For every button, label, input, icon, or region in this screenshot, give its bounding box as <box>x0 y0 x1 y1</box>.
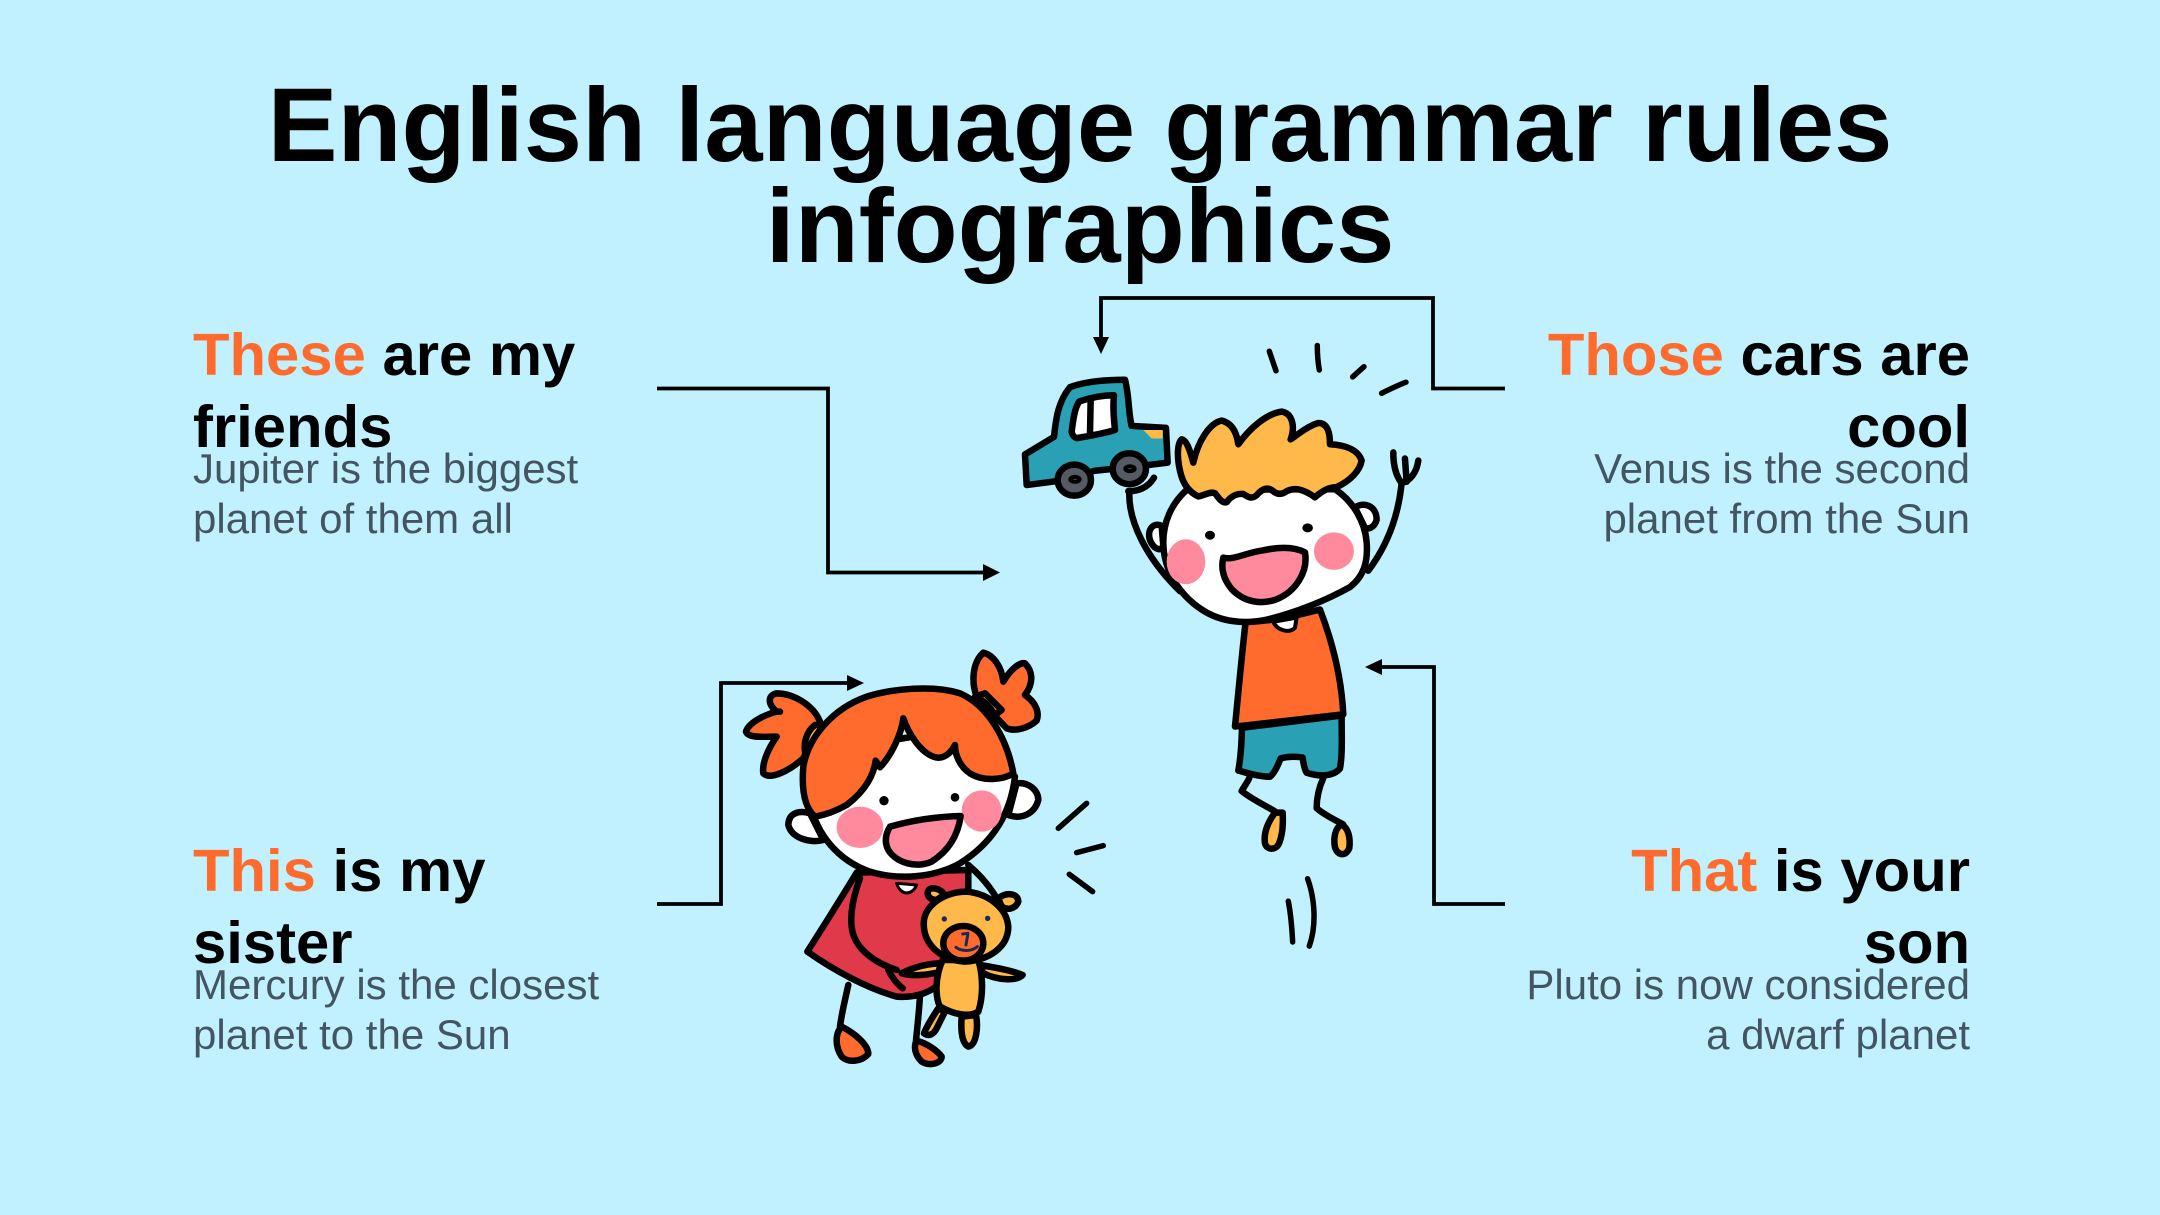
text block: These are my friends: friends <box>193 393 392 460</box>
text block: This is my sister: planet to the Sun <box>193 1011 511 1058</box>
title: English language grammar rules <box>268 67 1892 184</box>
text block: This is my sister: Mercury is the closest <box>193 961 599 1008</box>
text block: That is your son: Pluto is now considered <box>1526 961 1970 1008</box>
text block: That is your son: a dwarf planet <box>1706 1011 1970 1058</box>
icon: boy shirt <box>1235 609 1343 727</box>
text block: This is my sister: sister <box>193 909 353 976</box>
text block: This is my sister: This is my <box>193 837 485 904</box>
icon: bear head <box>924 892 1008 962</box>
icon: motion lines beside girl <box>1058 803 1103 892</box>
icon: boy ears <box>1149 505 1377 549</box>
text block: These are my friends: These are my <box>193 321 575 388</box>
icon: bear ears <box>928 888 1018 909</box>
arrow: friends connector <box>657 388 1000 581</box>
icon: girl arm lines <box>851 865 997 988</box>
icon: girl eyes <box>879 793 959 805</box>
text block: Those cars are cool: Those cars are <box>1548 321 1970 388</box>
icon: boy head <box>1163 489 1367 622</box>
icon: bear arms <box>902 963 1023 979</box>
title <box>268 67 1892 285</box>
icon: girl mouth <box>886 816 961 865</box>
icon: girl legs <box>840 985 920 1041</box>
illustration: boy with toy car <box>1025 346 1418 946</box>
icon: boy arms <box>1128 452 1418 591</box>
icon: girl pigtails <box>746 653 1038 776</box>
icon: jump lines below boy <box>1288 879 1314 946</box>
icon: girl cheeks <box>837 790 1002 848</box>
text block: That is your son <box>1526 837 1970 1058</box>
icon: bear legs <box>924 1008 977 1047</box>
icon: motion lines above boy <box>1269 346 1406 393</box>
icon: boy mouth <box>1222 548 1306 602</box>
arrow: sister connector <box>657 675 864 904</box>
text block: These are my friends: planet of them all <box>193 495 513 542</box>
icon: bear body <box>937 960 982 1015</box>
title: infographics <box>766 168 1394 285</box>
arrow: cars connector <box>1093 298 1505 388</box>
icon: girl dress <box>807 870 968 997</box>
text block: These are my friends: Jupiter is the biggest <box>193 445 579 492</box>
icon: girl hair <box>803 689 1013 817</box>
icon: boy feet <box>1265 813 1350 854</box>
text block: Those cars are cool: planet from the Sun <box>1603 495 1970 542</box>
icon: girl collar <box>897 883 917 893</box>
icon: boy collar <box>1273 618 1297 631</box>
text block: These are my friends <box>193 321 579 542</box>
text block: Those cars are cool <box>1548 321 1970 542</box>
text block: That is your son: son <box>1864 909 1970 976</box>
icon: girl ears <box>788 783 1038 841</box>
icon: boy shorts <box>1238 716 1342 777</box>
icon: girl feet <box>837 1027 942 1064</box>
icon: girl face <box>810 730 1015 877</box>
icon: teddy bear <box>902 888 1023 1047</box>
icon: boy legs <box>1242 778 1343 824</box>
icon: boy hair <box>1178 412 1362 502</box>
icon: bear eyes <box>942 916 990 922</box>
illustration: girl with teddy bear <box>746 653 1103 1064</box>
text block: Those cars are cool: Venus is the second <box>1594 445 1970 492</box>
icon: toy car <box>1025 380 1168 496</box>
icon: boy eyes <box>1205 523 1313 540</box>
arrow: son connector <box>1365 659 1505 904</box>
icon: bear muzzle <box>943 926 983 961</box>
text block: That is your son: That is your <box>1631 837 1970 904</box>
icon: bear smile <box>956 933 977 950</box>
text block: Those cars are cool: cool <box>1847 393 1970 460</box>
text block: This is my sister <box>193 837 599 1058</box>
icon: boy cheeks <box>1167 532 1354 584</box>
